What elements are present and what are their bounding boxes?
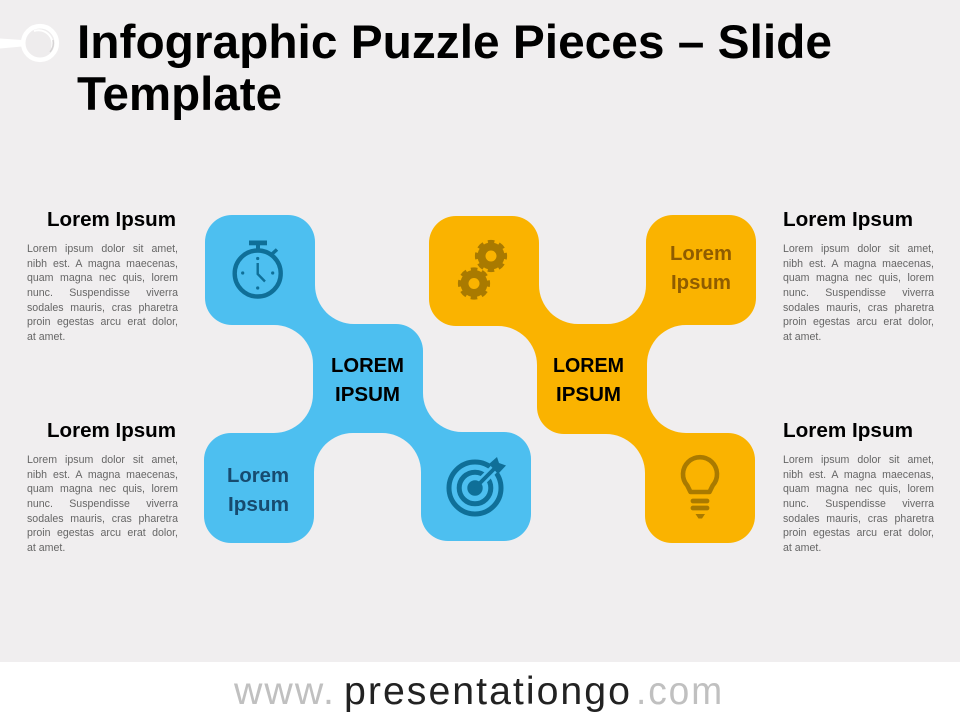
footer website text: .com — [636, 670, 724, 713]
footer website text: www. — [233, 670, 336, 713]
panel: orange puzzle piece — [429, 215, 756, 543]
pin icon — [0, 26, 57, 60]
text block: lower right: nibh est. A magna maecenas, — [783, 469, 934, 481]
text block: upper right: nunc. Suspendisse viverra — [783, 287, 934, 299]
icon: target with arrow — [449, 457, 506, 514]
text block: upper right: nibh est. A magna maecenas, — [783, 258, 934, 270]
heading: lower right: Lorem Ipsum — [783, 419, 913, 442]
heading: upper left: Lorem Ipsum — [47, 208, 176, 231]
icon: stopwatch — [235, 240, 281, 296]
text block: lower right: sodales mauris, cras pharetra — [783, 513, 934, 525]
text block: lower left — [27, 454, 178, 554]
text block: upper right: sodales mauris, cras pharetra — [783, 302, 934, 314]
title: Infographic Puzzle Pieces – Slide — [77, 15, 832, 68]
text block: upper left: sodales mauris, cras pharetra — [27, 302, 178, 314]
text block: upper left: proin egestas arcu erat dolor, — [27, 316, 178, 328]
icon: gears — [459, 241, 506, 298]
text block: lower right — [783, 454, 934, 554]
text block: lower left: nibh est. A magna maecenas, — [27, 469, 178, 481]
label: orange centre: LOREM — [553, 355, 624, 377]
label: orange upper-right — [670, 243, 732, 294]
label: orange centre — [553, 355, 624, 406]
label: blue lower-left: Ipsum — [228, 494, 289, 516]
label: blue lower-left: Lorem — [227, 465, 289, 487]
heading: lower left: Lorem Ipsum — [47, 419, 176, 442]
label: blue centre: IPSUM — [335, 384, 400, 406]
text block: upper left — [27, 243, 178, 343]
panel: blue puzzle piece — [204, 215, 531, 543]
text block: upper right: proin egestas arcu erat dolor, — [783, 316, 934, 328]
text block: upper right: Lorem ipsum dolor sit amet, — [783, 243, 934, 255]
text block: upper left: nibh est. A magna maecenas, — [27, 258, 178, 270]
text block: upper right — [783, 243, 934, 343]
label: orange upper-right: Ipsum — [671, 272, 731, 294]
text block: lower left: proin egestas arcu erat dolor, — [27, 527, 178, 539]
text block: upper right: at amet. — [783, 331, 821, 343]
text block: upper left: nunc. Suspendisse viverra — [27, 287, 178, 299]
text block: lower left: sodales mauris, cras pharetra — [27, 513, 178, 525]
text block: lower right: proin egestas arcu erat dolor, — [783, 527, 934, 539]
text block: lower left: Lorem ipsum dolor sit amet, — [27, 454, 178, 466]
label: orange upper-right: Lorem — [670, 243, 732, 265]
heading: upper right: Lorem Ipsum — [783, 208, 913, 231]
label: orange centre: IPSUM — [556, 384, 621, 406]
label: blue centre: LOREM — [331, 355, 404, 377]
text block: lower left: quam magna nec quis, lorem — [27, 483, 178, 495]
title — [77, 15, 832, 120]
text block: lower left: nunc. Suspendisse viverra — [27, 498, 178, 510]
title: Template — [77, 67, 282, 120]
text block: lower right: nunc. Suspendisse viverra — [783, 498, 934, 510]
text block: upper left: quam magna nec quis, lorem — [27, 272, 178, 284]
label: blue centre — [331, 355, 404, 406]
label: blue lower-left — [227, 465, 289, 516]
text block: upper left: Lorem ipsum dolor sit amet, — [27, 243, 178, 255]
text block: lower right: Lorem ipsum dolor sit amet, — [783, 454, 934, 466]
footer website text: presentationgo — [344, 670, 632, 713]
text block: upper left: at amet. — [27, 331, 65, 343]
text block: lower right: quam magna nec quis, lorem — [783, 483, 934, 495]
text block: lower left: at amet. — [27, 542, 65, 554]
text block: upper right: quam magna nec quis, lorem — [783, 272, 934, 284]
footer band — [0, 662, 960, 720]
footer website text — [233, 670, 724, 713]
text block: lower right: at amet. — [783, 542, 821, 554]
icon: light bulb — [683, 457, 717, 518]
